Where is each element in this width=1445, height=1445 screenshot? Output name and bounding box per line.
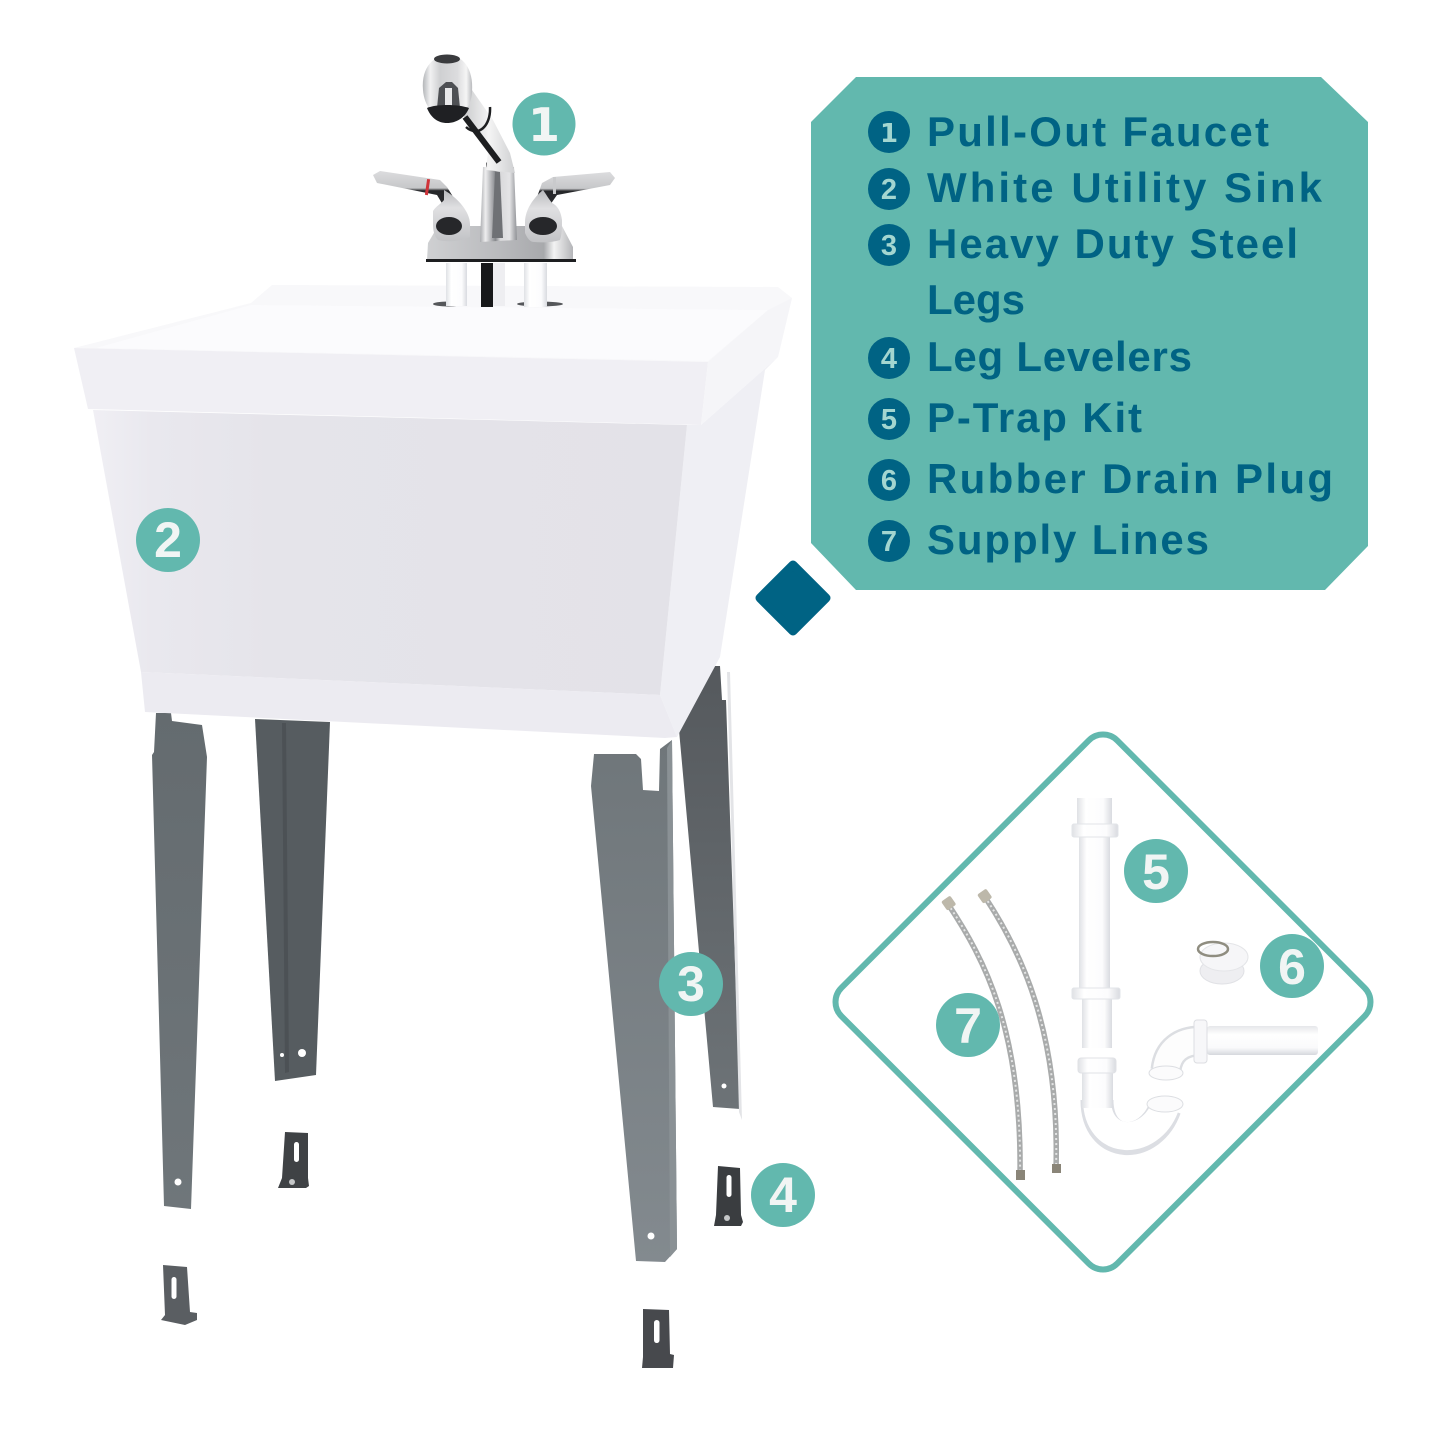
list item 5: 5 [881,404,897,436]
sink rear ledge [74,285,792,362]
callout number 5: 5 [1142,844,1170,900]
callout number 2 [136,508,200,572]
leveler front left [161,1265,197,1325]
illustration: white utility sink tub [74,285,792,738]
faucet deck plate [426,226,576,262]
leg: back left [255,719,330,1081]
list item 3: Legs [927,276,1025,323]
leg: front right [591,740,677,1262]
parts list panel [811,77,1368,590]
list item 6: Rubber Drain Plug [927,455,1333,502]
callout number 7: 7 [954,998,982,1054]
outlined diamond frame [827,726,1379,1278]
sink rim right flank [701,298,792,425]
supply line left [941,895,1025,1180]
callout number 4 [751,1163,815,1227]
list item 1: 1 [880,119,898,149]
callout number 5 [1124,839,1188,903]
list item 3: 3 [881,230,897,262]
supply line right [977,888,1061,1173]
leg: back right [678,666,742,1120]
list item 2: 2 [881,174,897,206]
faucet left handle [373,171,470,241]
callout number 1: 1 [528,98,560,152]
list item 3: Heavy Duty Steel [927,220,1298,267]
sink front body [93,410,687,695]
list item 6: 6 [881,465,897,497]
decorative navy diamond [760,565,826,631]
faucet holes [433,302,563,306]
faucet supply pipes [446,263,547,307]
illustration: rubber drain plug [1198,942,1248,984]
list item 1: Pull-Out Faucet [927,108,1269,155]
faucet spray head [423,54,472,123]
leveler back right [714,1166,743,1226]
p-trap elbow and arm [1149,1020,1318,1080]
illustration: leg levelers [161,1132,743,1368]
list item 2: White Utility Sink [927,164,1323,211]
illustration: p-trap kit [1072,798,1318,1139]
faucet right handle [525,172,615,242]
callout number 3 [659,952,723,1016]
sink right side [660,357,778,737]
illustration: faucet [373,54,615,307]
p-trap bend [1078,1058,1183,1139]
leveler back left [278,1132,309,1188]
faucet spout column [480,162,517,242]
callout number 4: 4 [769,1167,797,1223]
tailpiece pipe [1072,798,1120,1048]
list item 4: 4 [881,343,897,375]
illustration: sink legs [152,666,742,1262]
sink lower band [141,672,677,738]
callout number 2: 2 [154,512,182,568]
callout number 1 [512,92,576,156]
sink front rim [74,348,708,425]
faucet pull-out arm [463,90,515,173]
callout number 6 [1260,934,1324,998]
list item 3 [868,220,1298,323]
callout number 7 [936,993,1000,1057]
callout number 6: 6 [1278,939,1306,995]
list item 4: Leg Levelers [927,333,1192,380]
leveler front right [642,1309,674,1368]
illustration: supply lines [941,888,1061,1180]
sink basin [96,305,768,361]
list item 5: P-Trap Kit [927,394,1142,441]
callout number 3: 3 [677,956,705,1012]
panel background [811,77,1368,590]
list item 7: Supply Lines [927,516,1209,563]
list item 7: 7 [881,526,897,558]
leg: front left [152,713,207,1209]
